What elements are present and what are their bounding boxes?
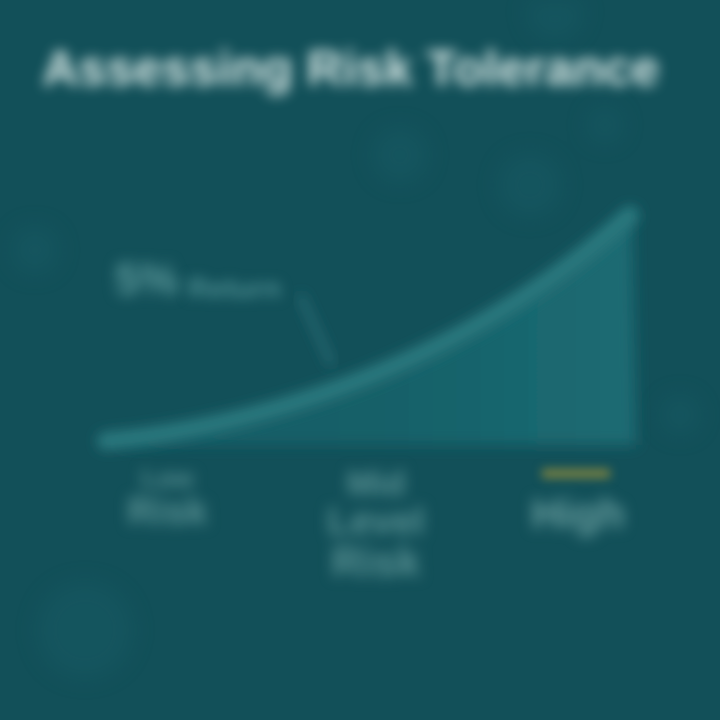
label: medium risk [323,465,428,585]
label: low risk: Low [142,463,194,493]
label: low risk: Risk [127,491,208,533]
pointer line [300,295,332,365]
callout text: Return [188,273,281,305]
label: medium risk: Mid [347,465,405,503]
title: Assessing Risk Tolerance [42,41,660,96]
callout label: 5% [115,255,179,304]
accent bar: high risk [542,469,610,478]
curve line [106,215,630,441]
label: medium risk: Level [327,501,425,543]
area under curve [110,212,636,445]
label: medium risk: Risk [332,538,420,585]
label: high risk: High [531,490,625,537]
label: low risk [123,463,210,533]
